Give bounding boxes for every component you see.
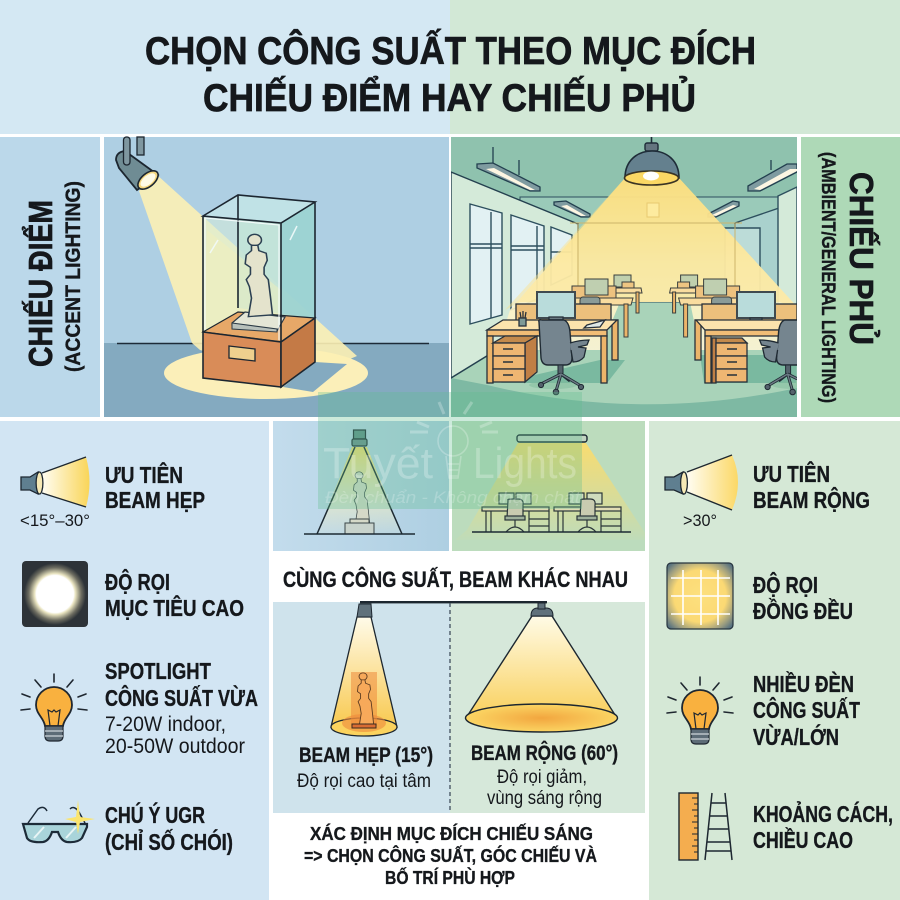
text: uniform illuminance: ĐỘ RỌI [753, 571, 818, 598]
floor [452, 302, 797, 404]
text: prefer narrow beam: BEAM HẸP [105, 487, 205, 513]
watermark: Tuyết Lights: Tuyết [323, 439, 433, 488]
case shadow [283, 362, 347, 392]
right wall columns [724, 186, 797, 304]
back wall [520, 197, 778, 302]
text: high target illuminance: MỤC TIÊU CAO [105, 594, 244, 621]
panel: ambient lighting side label: CHIẾU PHỦ [843, 172, 880, 345]
text: prefer narrow beam: ƯU TIÊN [105, 461, 183, 488]
plinth [232, 312, 285, 331]
base [203, 312, 315, 342]
text: high target illuminance [105, 568, 244, 621]
panel: ambient tips right column [649, 421, 900, 900]
front right desk [695, 292, 797, 383]
conclusion text: XÁC ĐỊNH MỤC ĐÍCH CHIẾU SÁNG [310, 823, 593, 844]
icon: light bulb [667, 677, 733, 744]
text: many lamps, medium or high power: VỪA/LỚN [753, 723, 839, 750]
panel: narrow beam comparison [273, 602, 450, 813]
plaque [229, 346, 255, 361]
statue [245, 234, 272, 317]
light cone [497, 178, 800, 350]
title: CHIẾU ĐIỂM HAY CHIẾU PHỦ [203, 75, 696, 120]
watermark: Tuyết Lights [318, 392, 582, 509]
panel: accent tips left column [0, 421, 269, 900]
panel: ambient lighting side label: (AMBIENT/GENERAL LIGHTING) [817, 152, 838, 403]
watermark: Tuyết Lights: Lights [473, 439, 577, 488]
hanging dome lamp [624, 137, 679, 185]
icon: ruler and ladder [679, 793, 732, 860]
panel: accent lighting side label: (ACCENT LIGHTING) [62, 181, 85, 372]
icon: wide beam flashlight [665, 455, 738, 510]
floor line [117, 342, 429, 344]
panel: ambient beam diagram [452, 421, 645, 551]
back desk rows [567, 275, 745, 337]
text: prefer narrow beam [105, 461, 205, 513]
panel: accent beam diagram [273, 421, 449, 551]
light beam [139, 174, 357, 380]
panel: office ambient lighting scene [451, 137, 820, 417]
text: prefer wide beam: ƯU TIÊN [753, 460, 830, 487]
icon: narrow beam flashlight [21, 457, 90, 507]
watermark: Tuyết Lights: Đèn chuẩn - Không chạm chất [325, 488, 581, 507]
text: moderate power spotlight: CÔNG SUẤT VỪA [105, 684, 258, 711]
panel: narrow beam comparison: BEAM HẸP (15°) [299, 744, 433, 767]
panel: accent lighting side label: CHIẾU ĐIỂM [22, 200, 59, 367]
icon: bright spot on dark square [22, 561, 88, 627]
right office chair [758, 319, 797, 396]
text: many lamps, medium or high power: CÔNG SUẤT [753, 696, 860, 723]
left office chair [529, 320, 589, 395]
text: UGR note [105, 801, 233, 855]
text: UGR note: (CHỈ SỐ CHÓI) [105, 827, 233, 855]
text: wide beam angle: >30° [683, 511, 717, 530]
text: spacing and height: CHIỀU CAO [753, 826, 853, 853]
panel: narrow beam comparison: Độ rọi cao tại tâm [297, 771, 431, 792]
panel: wide beam comparison: vùng sáng rộng [487, 788, 602, 809]
title: CHỌN CÔNG SUẤT THEO MỤC ĐÍCH [145, 28, 756, 73]
conclusion text [270, 813, 648, 900]
windows [470, 204, 572, 324]
text: moderate power spotlight: 7-20W indoor, [105, 713, 226, 736]
panel: ambient lighting side label [801, 137, 900, 417]
glass display case [203, 195, 315, 387]
heading: same power, different beam [273, 551, 645, 602]
text: UGR note: CHÚ Ý UGR [105, 801, 205, 828]
spotlight fixture [116, 137, 161, 193]
connector bar and divider [360, 601, 547, 813]
panel: museum spotlight scene [104, 137, 449, 417]
text: many lamps, medium or high power [753, 670, 860, 750]
text: uniform illuminance [753, 571, 853, 624]
text: uniform illuminance: ĐỒNG ĐỀU [753, 597, 853, 624]
icon: even light grid [667, 563, 733, 629]
panel: accent lighting side label [0, 137, 100, 417]
text: moderate power spotlight: 20-50W outdoor [105, 735, 245, 758]
text: many lamps, medium or high power: NHIỀU ĐÈN [753, 670, 854, 697]
text: high target illuminance: ĐỘ RỌI [105, 568, 170, 595]
icon: light bulb [21, 674, 87, 741]
text: spacing and height [753, 799, 893, 853]
text: moderate power spotlight: SPOTLIGHT [105, 658, 211, 684]
title [145, 28, 756, 120]
text: moderate power spotlight [105, 658, 258, 758]
icon: glasses with glare [23, 800, 95, 842]
panel: wide beam comparison: Độ rọi giảm, [497, 767, 587, 788]
floor light pool [164, 347, 368, 399]
ceiling lights [477, 147, 797, 217]
panel: wide beam comparison: BEAM RỘNG (60°) [471, 741, 618, 765]
heading: same power, different beam: CÙNG CÔNG SUẤT, BEAM KHÁC NHAU [283, 567, 628, 592]
case edges [203, 195, 315, 342]
text: prefer wide beam: BEAM RỘNG [753, 486, 870, 513]
conclusion text: => CHỌN CÔNG SUẤT, GÓC CHIẾU VÀ [304, 845, 597, 866]
text: narrow beam angle: <15°–30° [20, 511, 90, 530]
conclusion text: BỐ TRÍ PHÙ HỢP [385, 867, 515, 888]
text: prefer wide beam [753, 460, 870, 513]
front left desk [487, 292, 625, 383]
left wall [451, 172, 578, 378]
panel: wide beam comparison [450, 602, 645, 813]
